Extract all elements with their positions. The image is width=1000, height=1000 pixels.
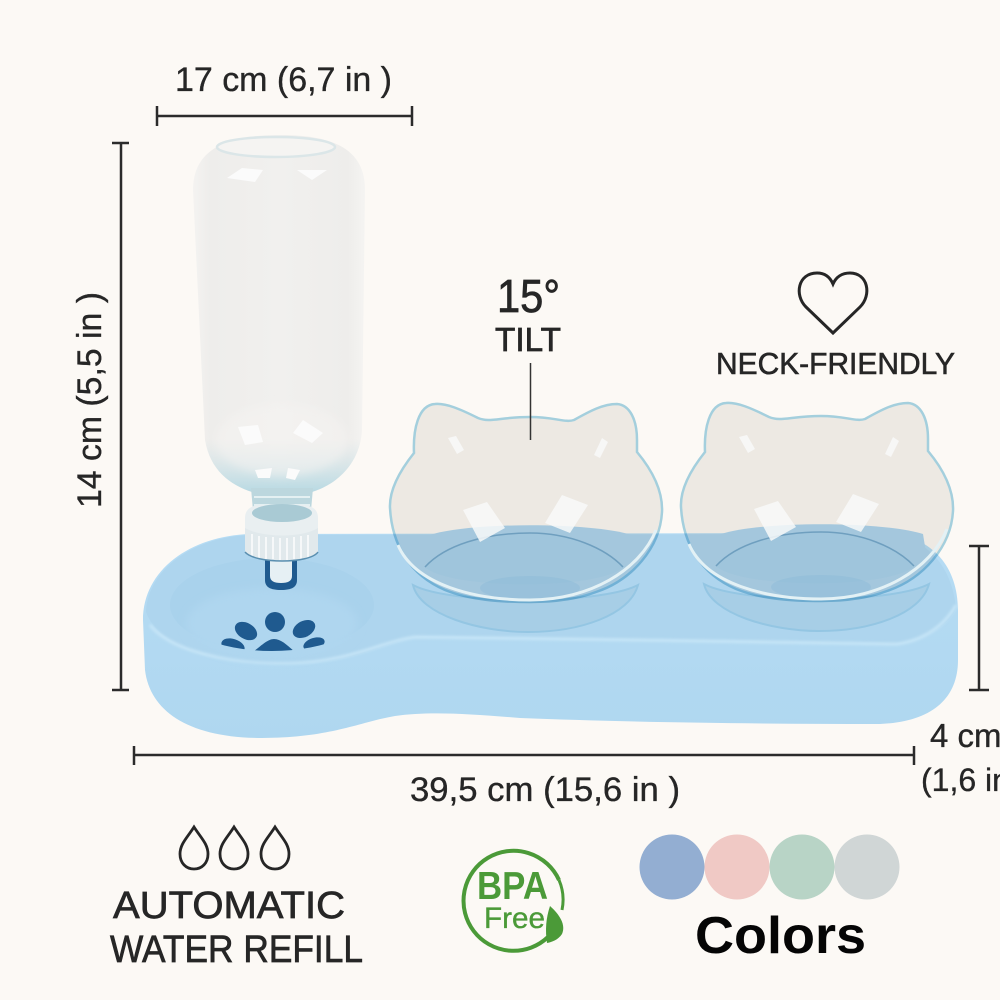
icon: leaf [546, 906, 563, 943]
dimension: width of bottle: 17 cm (6,7 in ) [175, 61, 392, 99]
icon: paw print [221, 612, 325, 651]
base top face [146, 534, 956, 663]
dimension: base height [969, 546, 989, 690]
feature: automatic water refill [110, 827, 363, 971]
bowl refraction [715, 524, 927, 559]
callout: 15 degree tilt [495, 270, 561, 440]
bottle neck [251, 488, 313, 522]
callout: neck-friendly [716, 273, 955, 381]
dimension: total length [134, 746, 914, 809]
dimension: total height [71, 143, 129, 690]
screw cap [245, 505, 318, 561]
icon: heart [799, 273, 867, 333]
label: base height value [921, 717, 1000, 798]
dimension: total length: 39,5 cm (15,6 in ) [410, 771, 680, 809]
bottle shoulder ring [216, 404, 348, 476]
bowl shell [390, 404, 662, 602]
bowl refraction [424, 525, 636, 560]
badge: BPA free [464, 851, 563, 951]
callout: 15 degree tilt: TILT [495, 321, 561, 358]
feature: automatic water refill: AUTOMATIC [113, 885, 345, 927]
bottle rim [217, 137, 335, 157]
bowl inner floor [716, 532, 914, 583]
bowl rim [398, 530, 656, 600]
bowl shell [681, 403, 953, 601]
label: base height value: 4 cm [930, 717, 1000, 754]
bottle body [193, 135, 365, 492]
product: water bottle [193, 135, 365, 590]
bowl foot [413, 585, 638, 632]
bowl highlights [448, 436, 608, 542]
water dish [221, 612, 325, 651]
dimension: total height: 14 cm (5,5 in ) [71, 292, 109, 508]
spout [265, 552, 297, 590]
product: cat-ear bowl left [390, 404, 662, 632]
label: colors: Colors [695, 907, 866, 965]
callout: 15 degree tilt: 15° [497, 270, 560, 322]
bowl rim [689, 529, 947, 599]
color swatches [640, 834, 900, 900]
callout: neck-friendly: NECK-FRIENDLY [716, 346, 955, 381]
dimension: width of bottle [157, 61, 412, 126]
product: feeder base [143, 533, 958, 738]
base highlight edge [150, 605, 956, 663]
feature: automatic water refill: WATER REFILL [110, 929, 363, 971]
bottle lower tint [193, 135, 365, 492]
bowl highlights [739, 435, 899, 541]
base body [143, 533, 958, 738]
badge: BPA free: Free [484, 902, 545, 935]
product: cat-ear bowl right [681, 403, 953, 631]
bottle highlights [227, 168, 327, 480]
bowl foot [704, 584, 929, 631]
badge: BPA free: BPA [477, 865, 548, 908]
bowl inner floor [425, 533, 623, 584]
icon: water drops [180, 827, 289, 869]
